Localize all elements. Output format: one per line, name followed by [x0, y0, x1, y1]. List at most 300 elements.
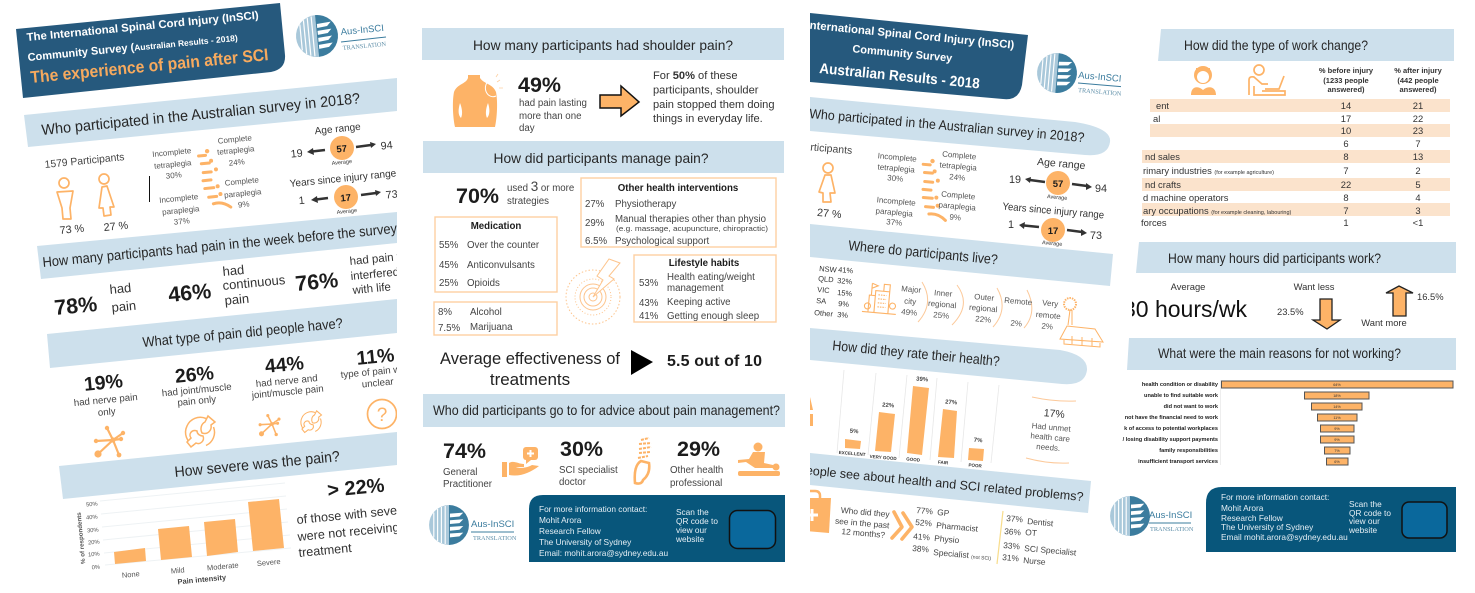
table: work type by injury: 7	[1415, 138, 1421, 149]
callout: unmet health care needs: 17%	[1043, 407, 1065, 421]
heading: who participated: Who participated in the Australian survey in 2018?	[809, 106, 1085, 145]
state breakdown list: 15%	[837, 288, 853, 298]
title banner	[810, 13, 1028, 100]
bar chart: self rated health: POOR	[968, 462, 983, 469]
table: work type by injury: answered)	[1399, 85, 1437, 94]
pain type: nerve only: only	[97, 406, 116, 419]
professionals seen, right column: 33%	[1003, 540, 1021, 552]
injury type with spine icon: paraplegia	[162, 204, 200, 217]
stat: average hours	[1123, 281, 1247, 322]
injury type with spine icon: tetraplegia	[939, 160, 978, 173]
stat: SCI specialist: doctor	[559, 477, 587, 488]
state breakdown list: VIC	[817, 285, 831, 295]
title banner: The International Spinal Cord Injury (InSCI)	[26, 10, 259, 44]
professionals seen, left column: GP	[937, 507, 950, 518]
professionals seen, right column: Dentist	[1027, 516, 1054, 528]
contact panel: The University of Sydney	[539, 537, 632, 547]
age and years since injury ranges: 1	[298, 195, 305, 207]
bar chart: pain intensity: 0%	[91, 565, 100, 571]
pain statistics: pain	[111, 298, 137, 315]
table: work type by injury: 22	[1413, 113, 1423, 124]
logo: Aus-InSCI	[429, 505, 517, 545]
title banner: Community Survey	[852, 43, 954, 65]
bar chart: pain intensity	[76, 483, 291, 586]
box: medication: 45%	[439, 260, 459, 271]
contact panel: Mohit Arora	[539, 515, 582, 525]
injury type with spine icon: Complete	[217, 133, 253, 146]
injury type with spine icon: Incomplete	[159, 192, 199, 205]
remoteness categories: remote	[1035, 310, 1062, 321]
remoteness categories: 49%	[901, 307, 918, 318]
title banner: Australian Results - 2018	[819, 61, 980, 92]
age and years since injury ranges: 1	[1008, 219, 1014, 231]
logo: Aus-InSCI: Aus-InSCI	[1078, 70, 1122, 85]
bar chart: self rated health: EXCELLENT	[839, 450, 866, 457]
age and years since injury ranges: 73	[385, 188, 398, 202]
professionals seen, left column	[912, 505, 992, 562]
participants count and gender icons: 1579 Participants	[44, 151, 125, 171]
box: other health interventions: Other health interventions	[618, 183, 738, 194]
participants count and gender icons: 73 %	[59, 223, 85, 237]
heading: manage pain	[423, 141, 784, 173]
stat: average hours: 30 hours/wk	[1123, 296, 1247, 322]
pain type: joint or muscle only	[161, 362, 232, 447]
logo: Aus-InSCI: TRANSLATION	[343, 41, 387, 52]
pain type: nerve and joint or muscle: 44%	[264, 352, 305, 378]
pain statistics: had pain that	[349, 250, 417, 268]
injury type with spine icon: 24%	[949, 172, 966, 183]
question: who did they see	[835, 507, 890, 538]
table: work type by injury	[1141, 66, 1450, 228]
heading: where do participants live: Where do participants live?	[848, 237, 999, 267]
pain type: unclear	[340, 348, 397, 430]
bar chart: pain intensity: 20%	[88, 539, 100, 547]
box: other health interventions: (e.g. massage, acupuncture, chiropractic)	[616, 224, 769, 233]
pain statistics: with life	[351, 281, 391, 297]
box: medication: Opioids	[467, 278, 500, 289]
box: other health interventions: 27%	[585, 199, 605, 210]
stat: want less hours: 23.5%	[1277, 306, 1304, 317]
funnel chart: reasons for not working: 14%	[1333, 405, 1341, 409]
funnel chart: reasons for not working: health condition or disability	[1142, 382, 1219, 388]
pain type: unclear: 11%	[355, 344, 395, 370]
funnel chart: reasons for not working: 9%	[1334, 438, 1340, 442]
bar chart: self rated health: 39%	[916, 376, 929, 384]
contact panel: Research Fellow	[539, 526, 602, 536]
contact panel: Scan the	[676, 507, 709, 517]
table: work type by injury: 7	[1343, 205, 1349, 216]
funnel chart: reasons for not working: did not want to work	[1164, 404, 1219, 410]
contact panel: The University of Sydney	[1221, 522, 1314, 532]
age and years since injury ranges: 17	[1048, 226, 1058, 237]
age and years since injury ranges: 57	[1053, 179, 1063, 190]
table: work type by injury: rimary industries (for example agriculture)	[1143, 165, 1274, 176]
heading: who participated	[24, 78, 397, 147]
age and years since injury ranges: 19	[1009, 174, 1021, 186]
stat: 49 percent	[518, 73, 587, 134]
bar chart: pain intensity: % of respondents	[76, 511, 87, 564]
box: medication: Anticonvulsants	[467, 260, 535, 271]
box: other health interventions: Physiotherapy	[615, 199, 677, 210]
heading: type of work	[1158, 29, 1454, 61]
stat: 49 percent: had pain lasting	[519, 98, 587, 109]
heading: how rate health	[810, 328, 1087, 384]
panel: page 4 overview	[1110, 29, 1456, 552]
funnel chart: reasons for not working: 7%	[1334, 449, 1340, 453]
pain type: nerve only: 19%	[83, 370, 124, 396]
injury type with spine icon: tetraplegia	[154, 158, 192, 171]
heading: who participated: Who participated in the Australian survey in 2018?	[41, 90, 361, 139]
stat: 49 percent: day	[519, 123, 535, 134]
contact panel: QR code to	[1349, 508, 1391, 518]
text: average effectiveness: treatments	[490, 370, 570, 389]
box: medication: 55%	[439, 240, 459, 251]
callout: unmet health care needs: Had unmet	[1031, 421, 1072, 434]
remoteness categories: Outer	[974, 292, 995, 303]
heading: type of pain	[47, 299, 397, 368]
stat: 5.5 out of 10: 5.5 out of 10	[667, 353, 762, 370]
injury type with spine icon: 30%	[165, 170, 182, 181]
injury type with spine icon: 30%	[887, 173, 904, 184]
state breakdown list	[814, 264, 854, 320]
remoteness categories: Major	[901, 284, 922, 295]
question: who did they see: 12 months?	[841, 526, 886, 540]
state breakdown list: NSW	[819, 264, 838, 275]
pain type: joint or muscle only: 26%	[174, 362, 215, 388]
age and years since injury ranges: 17	[340, 193, 352, 205]
participants count and gender icons: 27 %	[103, 220, 129, 234]
arrow: double chevron	[892, 512, 912, 539]
remoteness categories: regional	[969, 303, 998, 314]
bar chart: pain intensity: 50%	[86, 501, 98, 509]
stat: want more hours: Want more	[1361, 317, 1407, 328]
professionals seen, right column: 37%	[1006, 513, 1024, 525]
table: work type by injury: nd sales	[1145, 151, 1180, 162]
heading: where do participants live	[810, 224, 1113, 286]
stat: 49 percent: 49%	[518, 73, 561, 97]
remoteness categories: 25%	[933, 310, 950, 321]
state breakdown list: 9%	[838, 299, 850, 309]
age and years since injury ranges	[289, 122, 398, 216]
table: work type by injury: % after injury	[1394, 66, 1443, 75]
stat: 70 percent strategies: strategies	[507, 196, 549, 207]
heading: advice about pain	[423, 394, 785, 427]
injury type with spine icon: Complete	[224, 175, 260, 188]
bar chart: pain intensity: 10%	[88, 551, 100, 559]
bar chart: self rated health: VERY GOOD	[869, 454, 898, 461]
state breakdown list: 41%	[838, 265, 854, 275]
heading: hours worked	[1136, 242, 1456, 273]
box: alcohol and marijuana: 8%	[438, 307, 452, 318]
pain statistics: had	[109, 280, 132, 297]
heading: who do people see: Who do people see about health and SCI related problems?	[752, 458, 1084, 504]
contact panel: Email: mohit.arora@sydney.edu.au	[539, 548, 668, 558]
table: work type by injury: 4	[1415, 192, 1421, 203]
stat: general practitioner: General	[443, 467, 477, 478]
pain statistics: 78%	[53, 292, 98, 320]
injury type with spine icon: Complete	[942, 150, 977, 162]
table: work type by injury: (1233 people	[1323, 76, 1369, 85]
remoteness categories: 22%	[975, 314, 992, 325]
professionals seen, right column	[1002, 513, 1077, 567]
age and years since injury ranges: Age range	[314, 122, 362, 137]
table: work type by injury: 2	[1415, 165, 1421, 176]
pain type: unclear: ?	[377, 405, 387, 426]
logo: Aus-InSCI: TRANSLATION	[473, 535, 517, 542]
stat: general practitioner: 74%	[443, 439, 486, 463]
heading: hours worked: How many hours did participants work?	[1168, 250, 1381, 266]
stat: other health professional: professional	[670, 478, 722, 489]
text: stopped everyday life: pain stopped them doing	[653, 99, 775, 111]
table: work type by injury: 14	[1341, 100, 1351, 111]
logo: Aus-InSCI	[1110, 496, 1194, 536]
contact panel: Research Fellow	[1221, 513, 1284, 523]
box: alcohol and marijuana: Alcohol	[470, 307, 502, 318]
table: work type by injury: 22	[1341, 179, 1351, 190]
box: lifestyle habits: management	[667, 283, 724, 294]
age and years since injury ranges: Average	[331, 159, 352, 167]
age and years since injury ranges: Years since injury range	[1002, 202, 1105, 221]
table: work type by injury: 1	[1343, 217, 1349, 228]
box: other health interventions: Psychological support	[615, 236, 710, 247]
bar chart: self rated health: FAIR	[938, 460, 949, 466]
heading: shoulder pain	[422, 28, 784, 60]
stat: want less hours	[1277, 281, 1340, 329]
stat: general practitioner	[443, 439, 539, 490]
heading: type of work: How did the type of work change?	[1184, 37, 1368, 53]
pain type: nerve only	[73, 370, 138, 458]
state breakdown list: Other	[814, 308, 834, 319]
icon: city buildings	[862, 283, 898, 314]
injury type with spine icon: Incomplete	[877, 151, 918, 164]
injury type with spine icon: tetraplegia	[217, 144, 255, 157]
bar chart: self rated health	[837, 370, 999, 469]
heading: how severe	[59, 432, 397, 499]
remoteness categories	[901, 282, 1062, 331]
pain statistics: interfered	[350, 266, 400, 283]
bar chart: self rated health: 7%	[974, 438, 983, 444]
stat: SCI specialist	[559, 437, 651, 488]
callout: untreated severe pain	[297, 478, 397, 557]
pain statistics: 76%	[294, 268, 339, 296]
logo: Aus-InSCI: TRANSLATION	[1150, 526, 1194, 533]
stat: other health professional: Other health	[670, 465, 723, 476]
funnel chart: reasons for not working: insufficient transport services	[1138, 459, 1218, 465]
funnel chart: reasons for not working: unable to find suitable work	[1144, 393, 1219, 399]
injury type with spine icon: Incomplete	[152, 146, 192, 159]
logo: Aus-InSCI: TRANSLATION	[1078, 87, 1122, 98]
table: work type by injury: 17	[1341, 113, 1351, 124]
injury type with spine icon: paraplegia	[938, 200, 977, 213]
text: stopped everyday life: participants, shoulder	[653, 84, 759, 96]
table: work type by injury: 10	[1341, 125, 1351, 136]
professionals seen, left column: Physio	[934, 533, 960, 545]
remoteness categories: regional	[928, 299, 957, 310]
state breakdown list: QLD	[818, 274, 835, 284]
remoteness categories: Very	[1042, 298, 1059, 309]
box: alcohol and marijuana	[434, 302, 557, 335]
bar chart: pain intensity: Moderate	[207, 561, 239, 573]
table: work type by injury: nd crafts	[1145, 179, 1181, 190]
bar chart: self rated health: GOOD	[906, 456, 921, 463]
table: work type by injury: 3	[1415, 205, 1421, 216]
professionals seen, left column: Pharmacist	[936, 520, 979, 534]
stat: 70 percent strategies: 70%	[456, 184, 499, 208]
box: lifestyle habits: Keeping active	[667, 297, 731, 308]
stat: 70 percent strategies: used 3 or more	[507, 179, 574, 194]
pain type: joint or muscle only: pain only	[177, 394, 217, 409]
pain type: nerve and joint or muscle: had nerve and	[255, 373, 318, 390]
table: work type by injury: ent	[1156, 100, 1169, 111]
table: work type by injury: 13	[1413, 151, 1423, 162]
box: other health interventions: 6.5%	[585, 236, 607, 247]
bar chart: pain intensity: Severe	[257, 557, 281, 568]
panel: page 2 overview	[422, 28, 785, 562]
bar chart: self rated health: 22%	[882, 402, 895, 410]
pain type: unclear: type of pain was	[340, 363, 411, 381]
table: work type by injury: al	[1153, 113, 1160, 124]
arrow	[600, 86, 639, 116]
table: work type by injury: 7	[1343, 165, 1349, 176]
stat: want more hours: 16.5%	[1417, 291, 1444, 302]
table: work type by injury: 6	[1343, 138, 1349, 149]
age and years since injury ranges: Average	[1042, 240, 1063, 248]
text: stopped everyday life: For 50% of these	[653, 70, 738, 82]
remoteness categories: 2%	[1041, 322, 1053, 331]
pain type: nerve and joint or muscle	[250, 352, 324, 436]
box: medication: Over the counter	[467, 240, 540, 251]
callout: untreated severe pain: of those with severe pain	[296, 500, 436, 527]
box: lifestyle habits: 41%	[639, 311, 659, 322]
injury type with spine icon: 9%	[238, 199, 250, 210]
callout: untreated severe pain: > 22%	[326, 475, 386, 502]
title banner: The experience of pain after SCI	[30, 45, 269, 87]
funnel chart: reasons for not working: / losing disability support payments	[1123, 437, 1218, 443]
contact panel	[529, 495, 785, 562]
participants and gender icon: 27 %	[816, 207, 842, 221]
age and years since injury ranges: 94	[380, 139, 393, 153]
table: work type by injury: 23	[1413, 125, 1423, 136]
stat: other health professional: 29%	[677, 437, 720, 461]
panel: page 3 overview	[810, 13, 1121, 565]
title banner: Community Survey (Australian Results - 2018)	[27, 32, 238, 64]
injury type with spine icon: 9%	[949, 213, 961, 222]
box: lifestyle habits: 43%	[639, 298, 659, 309]
icon: fragment of orange health icon	[810, 397, 813, 426]
contact panel: website	[1348, 525, 1378, 535]
callout: untreated severe pain: treatment	[298, 541, 353, 560]
box: lifestyle habits: Getting enough sleep	[667, 311, 759, 322]
contact panel: Mohit Arora	[1221, 503, 1264, 513]
participants and gender icon: 1579 Participants	[771, 138, 853, 157]
box: lifestyle habits	[634, 255, 776, 322]
stat: 70 percent strategies	[456, 179, 574, 208]
contact panel	[1206, 487, 1456, 552]
heading: advice about pain: Who did participants go to for advice about pain management?	[433, 402, 780, 418]
table: work type by injury: (442 people	[1397, 76, 1439, 85]
bar chart: pain intensity: 40%	[86, 514, 98, 522]
professionals seen, left column: 41%	[913, 531, 931, 543]
logo: Aus-InSCI: Aus-InSCI	[1149, 510, 1192, 521]
state breakdown list: 32%	[837, 276, 853, 286]
callout: unmet health care needs: health care	[1030, 431, 1071, 444]
stat: want more hours	[1361, 286, 1444, 328]
icon: shoulder	[453, 74, 503, 127]
injury type with spine icon: 37%	[173, 216, 190, 227]
funnel chart: reasons for not working: 9%	[1334, 427, 1340, 431]
professionals seen, right column: 31%	[1002, 552, 1020, 564]
stat: SCI specialist: SCI specialist	[559, 465, 618, 476]
stat: want less hours: Want less	[1294, 281, 1335, 292]
injury type with spine icon: tetraplegia	[877, 162, 916, 175]
box: lifestyle habits: Health eating/weight	[667, 272, 755, 283]
age and years since injury ranges: 19	[290, 147, 303, 161]
bar chart: pain intensity: None	[121, 569, 140, 580]
age and years since injury ranges: Average	[1047, 194, 1068, 202]
injury type with spine icon: Incomplete	[876, 195, 917, 208]
funnel chart: reasons for not working: 18%	[1333, 394, 1341, 398]
contact panel: Email mohit.arora@sydney.edu.au	[1221, 532, 1348, 542]
pain statistics: continuous	[222, 272, 286, 293]
box: lifestyle habits: 53%	[639, 278, 659, 289]
contact panel: For more information contact:	[1221, 492, 1329, 502]
age and years since injury ranges: Average	[336, 208, 357, 216]
box: other health interventions: 29%	[585, 218, 605, 229]
box: other health interventions	[581, 178, 776, 247]
stat: SCI specialist: 30%	[560, 437, 603, 461]
funnel chart: reasons for not working: 11%	[1333, 416, 1341, 420]
age and years since injury ranges: Years since injury range	[289, 168, 397, 190]
age and years since injury ranges: 57	[336, 144, 348, 156]
pain type: nerve and joint or muscle: joint/muscle pain	[250, 384, 324, 402]
stat: other health professional	[670, 437, 780, 489]
state breakdown list: 3%	[837, 310, 849, 320]
heading: pain in the week before: How many participants had pain in the week before the survey	[42, 220, 398, 270]
panel: page 1 overview	[16, 3, 436, 586]
remoteness categories: 2%	[1010, 319, 1022, 328]
arrow: black triangle	[631, 350, 653, 375]
injury type with spine icon: 37%	[886, 217, 903, 228]
funnel chart: reasons for not working: 64%	[1333, 383, 1341, 387]
injury type with spine icon	[875, 150, 978, 228]
box: lifestyle habits: Lifestyle habits	[669, 258, 739, 269]
injury type with spine icon: 24%	[228, 157, 245, 168]
pain statistics: pain	[224, 291, 250, 308]
professionals seen, left column: 52%	[915, 517, 933, 529]
table: work type by injury: ary occupations (for example cleaning, labouring)	[1143, 205, 1292, 216]
table: work type by injury: % before injury	[1319, 66, 1374, 75]
participants and gender icon	[810, 143, 852, 218]
funnel chart: reasons for not working: k of access to potential workplaces	[1124, 426, 1218, 432]
bar chart: pain intensity: 30%	[87, 527, 99, 535]
logo: Aus-InSCI	[296, 15, 386, 57]
box: medication	[435, 217, 557, 292]
title banner	[16, 3, 285, 98]
contact panel: For more information contact:	[539, 504, 647, 514]
professionals seen, left column: 38%	[912, 543, 930, 555]
professionals seen, right column: 36%	[1004, 526, 1022, 538]
remoteness categories: Inner	[934, 288, 953, 299]
funnel chart: reasons for not working: family responsibilities	[1159, 448, 1218, 454]
funnel chart: reasons for not working: 6%	[1334, 460, 1340, 464]
injury type with spine icon: paraplegia	[875, 206, 914, 219]
table: work type by injury: <1	[1413, 217, 1423, 228]
professionals seen, left column: Specialist (not SCI)	[933, 547, 992, 562]
contact panel: QR code to	[676, 516, 718, 526]
heading: type of pain: What type of pain did people have?	[142, 315, 344, 350]
injury type with spine icon	[152, 133, 262, 227]
box: medication: 25%	[439, 278, 459, 289]
